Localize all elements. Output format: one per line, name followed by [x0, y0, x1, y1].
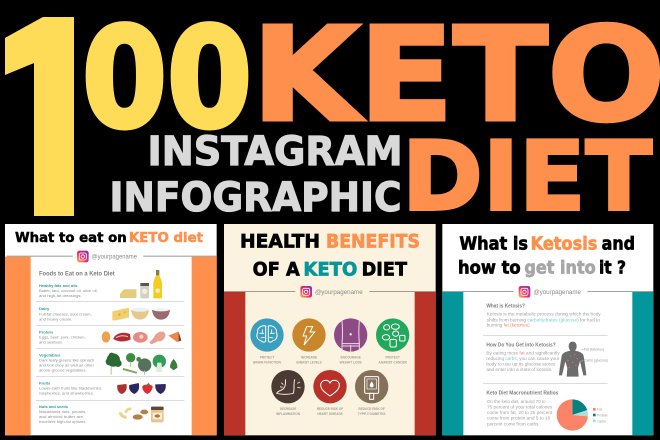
word DIET: DIET — [402, 122, 652, 232]
benefit: protect against cancer: AGAINST CANCER — [378, 360, 407, 364]
food list text: Lower-carb fruits like blackberries, — [39, 386, 102, 391]
pie chart: macronutrient ratios: Protein — [597, 413, 608, 417]
panel heading: and — [602, 234, 635, 254]
icons: fruits — [117, 383, 166, 394]
panel heading: KETO diet — [129, 230, 203, 246]
food list text: raspberries, and strawberries. — [39, 391, 94, 396]
title: 100 KETO DIET Instagram Infographic — [5, 17, 660, 216]
icon: human body with fat and carbs — [559, 342, 608, 377]
section: what is ketosis: Ketosis is the metabolic process during which the body — [487, 312, 601, 317]
food list text: Protein — [39, 329, 54, 334]
icons: vegetables — [106, 353, 177, 375]
benefit: reduce risk of heart disease — [313, 370, 347, 416]
section: how do you get into ketosis: How Do You Get into Ketosis? — [486, 342, 556, 348]
panel heading: BENEFITS — [326, 231, 420, 252]
panel: what to eat on keto diet — [5, 224, 217, 435]
pie chart: macronutrient ratios: Carbs — [597, 419, 606, 423]
panel heading: KETO — [303, 260, 357, 281]
panel heading: OF A — [253, 260, 300, 281]
benefit: decrease inflammation: INFLAMMATION — [276, 412, 300, 416]
food list text: Dairy — [39, 306, 50, 311]
section: what is ketosis: What is Ketosis? — [486, 303, 525, 309]
section: keto diet macronutrient ratios: come from fat, 20 to 25 percent — [487, 410, 553, 415]
panel heading: What is — [459, 234, 528, 254]
food list text: Macadamia nuts, pecans, — [39, 409, 86, 414]
panel heading: it ? — [599, 258, 626, 278]
benefit: protect brain function: BRAIN FUNCTION — [253, 360, 281, 364]
instagram handle — [442, 286, 653, 298]
section: how do you get into ketosis: body to use up its glucose stores — [486, 361, 556, 366]
instagram handle: @yourpagename — [533, 290, 582, 296]
food list text: Butter, lard, coconut oil, olive oil, — [39, 288, 98, 293]
benefit: encourage weight loss: WEIGHT LOSS — [340, 360, 362, 364]
benefit: increase energy levels: ENERGY LEVELS — [296, 360, 322, 364]
number 100 — [5, 17, 248, 216]
food list text: above-ground vegetables. — [39, 368, 87, 373]
icon: human body with fat and carbs: Fat (ketones) — [584, 347, 604, 351]
panel heading — [15, 230, 203, 246]
section: keto diet macronutrient ratios: On the keto diet, around 70 to — [487, 399, 546, 404]
instagram handle — [7, 251, 217, 262]
icons: protein — [102, 331, 181, 344]
panel: what is ketosis and how to get into it — [442, 224, 653, 435]
food list text: Healthy fats and oils — [39, 283, 78, 288]
section: how do you get into ketosis: and enter into a state of ketosis. — [486, 367, 552, 372]
food list text: Full-fat cheeses, sour cream, — [39, 311, 92, 316]
infographic subheading: Foods to Eat on a Keto Diet — [39, 271, 115, 277]
word KETO: KETO — [252, 0, 660, 150]
section: what is ketosis — [486, 303, 601, 328]
panel: health benefits of a keto diet — [224, 224, 436, 435]
benefit: encourage weight loss: ENCOURAGE — [340, 355, 361, 359]
food list text: and seafood. — [39, 340, 63, 345]
food list text: excellent high-fat options. — [39, 419, 87, 424]
section: what is ketosis: burning fat (ketones). — [487, 323, 531, 328]
section: how do you get into ketosis — [486, 342, 560, 372]
benefit: increase energy levels: INCREASE — [301, 355, 318, 359]
word INFOGRAPHIC: INFOGRAPHIC — [110, 175, 402, 221]
benefit: reduce risk of type 2 diabetes: TYPE 2 DIABETES — [358, 412, 386, 416]
food list text: Vegetables — [39, 353, 61, 358]
food list text: Dark leafy greens like spinach — [39, 358, 94, 363]
benefit: encourage weight loss — [334, 318, 367, 364]
benefit: protect against cancer — [376, 318, 409, 364]
number 100: 00 — [82, 0, 252, 159]
icons: nuts and seeds — [120, 407, 164, 422]
icons: dairy — [112, 308, 170, 320]
panel heading — [458, 234, 635, 278]
benefit: reduce risk of type 2 diabetes — [355, 370, 388, 416]
panel heading: DIET — [362, 260, 407, 281]
food list text: Fruits — [39, 381, 51, 386]
section: keto diet macronutrient ratios: percent come from carbs. — [487, 421, 540, 426]
benefit: decrease inflammation: DECREASE — [280, 407, 297, 411]
panel heading — [240, 231, 420, 281]
panel heading: What to eat on — [15, 230, 127, 246]
benefit: reduce risk of heart disease: HEART DISEASE — [317, 412, 343, 416]
benefit: increase energy levels — [292, 318, 326, 364]
panel heading: how to — [458, 258, 521, 278]
benefit: reduce risk of type 2 diabetes: REDUCE RISK OF — [358, 407, 385, 411]
benefit: protect against cancer: PROTECT — [385, 355, 400, 359]
panel heading: get into — [524, 258, 596, 278]
word INSTAGRAM: INSTAGRAM — [148, 129, 402, 175]
benefit: reduce risk of heart disease: REDUCE RISK OF — [317, 407, 344, 411]
panel heading: Ketosis — [531, 234, 597, 254]
food list text: and heavy cream. — [39, 316, 72, 321]
icons: fats and oils — [120, 270, 162, 298]
food list text — [39, 283, 102, 424]
instagram handle: @yourpagename — [92, 255, 138, 261]
pie chart: macronutrient ratios — [557, 399, 608, 431]
food list text: and bok choy as well as other — [39, 363, 95, 368]
icon: human body with fat and carbs: Carbs (glucose) — [584, 359, 608, 363]
food list text: and high-fat dressings. — [39, 293, 82, 298]
instagram handle: @yourpagename — [315, 290, 363, 296]
food list text: Nuts and seeds — [39, 404, 69, 409]
section: keto diet macronutrient ratios: Keto Diet Macronutrient Ratios — [486, 391, 558, 397]
section: keto diet macronutrient ratios: come from protein and 5 to 10 — [487, 416, 551, 421]
instagram handle — [224, 286, 436, 298]
section: how do you get into ketosis: By eating more fat and significantly — [486, 351, 560, 356]
section: how do you get into ketosis: reducing carbs, you can cause your — [486, 356, 560, 361]
food list text: and almond butter are — [39, 414, 84, 419]
benefit: decrease inflammation — [271, 370, 305, 416]
benefit: protect brain function — [250, 318, 284, 364]
panel heading: HEALTH — [240, 231, 320, 252]
section: what is ketosis: shifts from burning carbohydrates (glucose) for fuel to — [487, 317, 601, 322]
food list text: Eggs, beef, pork, chicken, — [39, 335, 86, 340]
benefit: protect brain function: PROTECT — [260, 355, 275, 359]
pie chart: macronutrient ratios: Fat — [597, 407, 602, 411]
section: keto diet macronutrient ratios — [486, 391, 558, 426]
section: keto diet macronutrient ratios: 75 percent of your total calories — [487, 405, 553, 410]
